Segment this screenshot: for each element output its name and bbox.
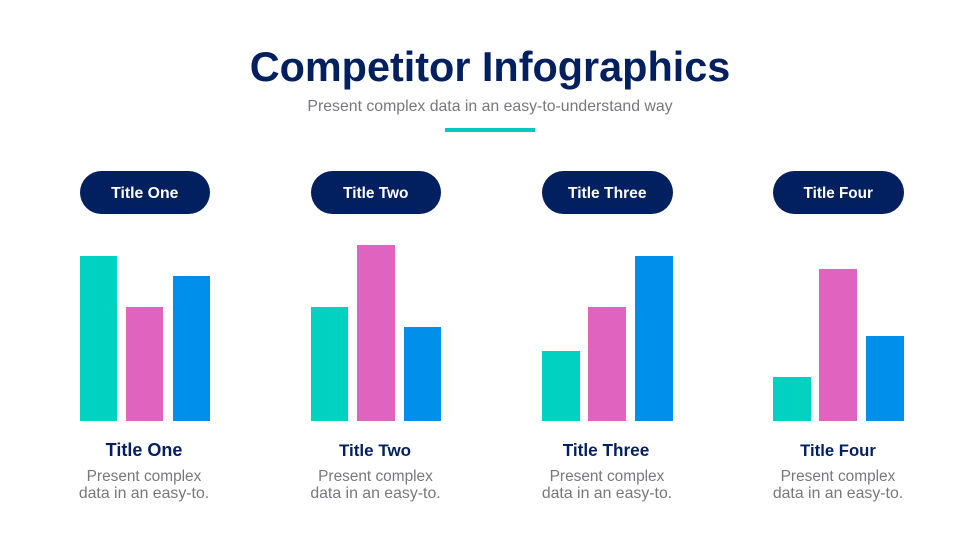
text: two: Present complex bbox=[318, 468, 433, 485]
heading: three: Title Three bbox=[563, 440, 649, 460]
text: one: Present complex bbox=[87, 468, 201, 485]
pill: title three: Title Three bbox=[568, 185, 647, 202]
title: Competitor Infographics bbox=[250, 44, 730, 90]
text: three: data in an easy-to. bbox=[542, 485, 672, 502]
pill: title three bbox=[542, 171, 672, 214]
text: two bbox=[310, 468, 441, 502]
bar chart: three bbox=[542, 256, 673, 421]
heading: two: Title Two bbox=[339, 441, 411, 460]
bar chart: one bbox=[80, 256, 210, 421]
text: one bbox=[79, 468, 209, 502]
text: four: data in an easy-to. bbox=[773, 485, 903, 502]
pill: title one bbox=[80, 171, 210, 214]
bar chart: four bbox=[773, 269, 904, 421]
subtitle: Present complex data in an easy-to-understand way bbox=[307, 98, 673, 115]
text: three bbox=[542, 468, 672, 502]
pill: title four: Title Four bbox=[804, 185, 873, 202]
pill: title two bbox=[310, 171, 441, 214]
text: four bbox=[773, 468, 903, 502]
text: three: Present complex bbox=[550, 468, 664, 485]
bar chart: two bbox=[311, 245, 441, 421]
text: two: data in an easy-to. bbox=[310, 485, 441, 502]
text: one: data in an easy-to. bbox=[79, 485, 209, 502]
heading: one: Title One bbox=[106, 440, 182, 460]
text: four: Present complex bbox=[781, 468, 895, 485]
pill: title one: Title One bbox=[111, 185, 178, 202]
heading: four: Title Four bbox=[800, 441, 876, 460]
pill: title two: Title Two bbox=[343, 185, 408, 202]
accent underline bbox=[445, 128, 535, 132]
pill: title four bbox=[773, 171, 904, 214]
